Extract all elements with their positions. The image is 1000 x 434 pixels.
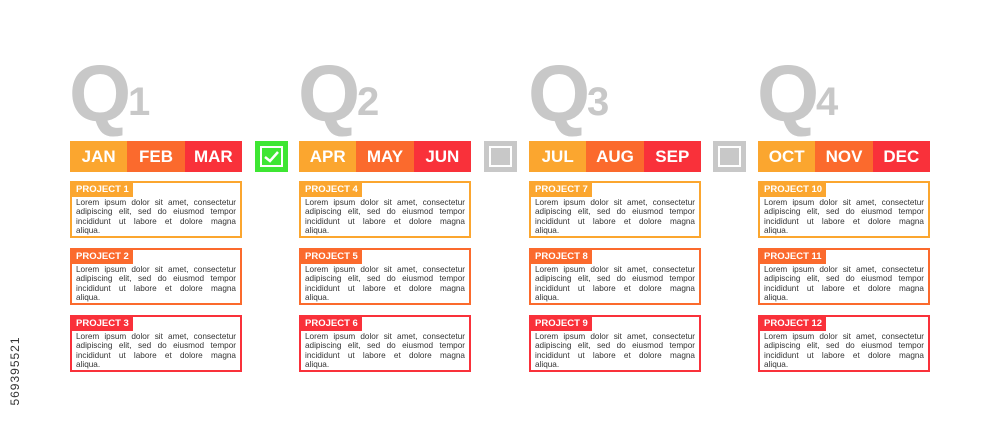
project 4: adipiscing elit, sed do eiusmod tempor xyxy=(305,207,465,216)
project 2: adipiscing elit, sed do eiusmod tempor xyxy=(76,274,236,283)
heading: Q4: Q xyxy=(757,49,819,138)
project 1 xyxy=(70,181,242,238)
project 3: PROJECT 3 xyxy=(76,318,129,329)
project 9: PROJECT 9 xyxy=(535,318,588,329)
project 10: Lorem ipsum dolor sit amet, consectetur xyxy=(764,198,924,207)
project 4: PROJECT 4 xyxy=(305,184,358,195)
project 8: aliqua. xyxy=(535,293,559,302)
months: Q2: JUN xyxy=(425,147,459,166)
project 3: aliqua. xyxy=(76,360,100,369)
months: Q1 xyxy=(70,141,242,172)
months: Q2: APR xyxy=(310,147,346,166)
project 1: PROJECT 1 xyxy=(76,184,129,195)
project 12 xyxy=(758,315,930,372)
project 6: incididunt ut labore et dolore magna xyxy=(305,351,465,360)
months: Q4: NOV xyxy=(826,147,862,166)
icon: checked box xyxy=(255,141,288,172)
project 2: incididunt ut labore et dolore magna xyxy=(76,284,236,293)
months: Q4: DEC xyxy=(883,147,919,166)
project 5 xyxy=(299,248,471,305)
project 10: adipiscing elit, sed do eiusmod tempor xyxy=(764,207,924,216)
project 12: PROJECT 12 xyxy=(764,318,822,329)
project 9 xyxy=(529,315,701,372)
project 6: Lorem ipsum dolor sit amet, consectetur xyxy=(305,332,465,341)
months: Q1: MAR xyxy=(194,147,233,166)
project 7: Lorem ipsum dolor sit amet, consectetur xyxy=(535,198,695,207)
months: Q2: MAY xyxy=(367,147,403,166)
project 3: Lorem ipsum dolor sit amet, consectetur xyxy=(76,332,236,341)
project 7: incididunt ut labore et dolore magna xyxy=(535,217,695,226)
column: Q1 xyxy=(69,49,242,372)
months: Q3: AUG xyxy=(596,147,634,166)
project 11: adipiscing elit, sed do eiusmod tempor xyxy=(764,274,924,283)
project 7: PROJECT 7 xyxy=(535,184,588,195)
project 4: aliqua. xyxy=(305,226,329,235)
project 6: aliqua. xyxy=(305,360,329,369)
project 5: aliqua. xyxy=(305,293,329,302)
months: Q1: JAN xyxy=(82,147,116,166)
project 1: aliqua. xyxy=(76,226,100,235)
project 9: Lorem ipsum dolor sit amet, consectetur xyxy=(535,332,695,341)
heading: Q2: 2 xyxy=(357,80,379,124)
stock id text: 569395521 xyxy=(8,336,22,406)
project 10: PROJECT 10 xyxy=(764,184,822,195)
project 11: PROJECT 11 xyxy=(764,251,822,262)
project 11: Lorem ipsum dolor sit amet, consectetur xyxy=(764,265,924,274)
project 9: aliqua. xyxy=(535,360,559,369)
project 11: incididunt ut labore et dolore magna xyxy=(764,284,924,293)
icon: empty box xyxy=(713,141,746,172)
project 7 xyxy=(529,181,701,238)
project 3 xyxy=(70,315,242,372)
project 3: incididunt ut labore et dolore magna xyxy=(76,351,236,360)
project 6: PROJECT 6 xyxy=(305,318,358,329)
project 4: Lorem ipsum dolor sit amet, consectetur xyxy=(305,198,465,207)
months: Q2 xyxy=(299,141,471,172)
project 11 xyxy=(758,248,930,305)
project 5: PROJECT 5 xyxy=(305,251,358,262)
project 4: incididunt ut labore et dolore magna xyxy=(305,217,465,226)
project 1: Lorem ipsum dolor sit amet, consectetur xyxy=(76,198,236,207)
project 8: PROJECT 8 xyxy=(535,251,588,262)
project 12: incididunt ut labore et dolore magna xyxy=(764,351,924,360)
months: Q3: JUL xyxy=(542,147,574,166)
project 2: Lorem ipsum dolor sit amet, consectetur xyxy=(76,265,236,274)
project 5: adipiscing elit, sed do eiusmod tempor xyxy=(305,274,465,283)
column: Q3 xyxy=(528,49,701,372)
months: Q1: FEB xyxy=(139,147,173,166)
months: Q3: SEP xyxy=(655,147,689,166)
project 7: adipiscing elit, sed do eiusmod tempor xyxy=(535,207,695,216)
project 6 xyxy=(299,315,471,372)
heading: Q3: 3 xyxy=(587,80,609,124)
heading: Q3: Q xyxy=(528,49,590,138)
project 2: PROJECT 2 xyxy=(76,251,129,262)
project 8: adipiscing elit, sed do eiusmod tempor xyxy=(535,274,695,283)
heading: Q1: 1 xyxy=(128,80,150,124)
project 12: aliqua. xyxy=(764,360,788,369)
project 6: adipiscing elit, sed do eiusmod tempor xyxy=(305,341,465,350)
project 9: adipiscing elit, sed do eiusmod tempor xyxy=(535,341,695,350)
heading: Q2: Q xyxy=(298,49,360,138)
project 7: aliqua. xyxy=(535,226,559,235)
project 9: incididunt ut labore et dolore magna xyxy=(535,351,695,360)
heading: Q1: Q xyxy=(69,49,131,138)
project 10 xyxy=(758,181,930,238)
project 4 xyxy=(299,181,471,238)
project 5: incididunt ut labore et dolore magna xyxy=(305,284,465,293)
project 8 xyxy=(529,248,701,305)
project 8: Lorem ipsum dolor sit amet, consectetur xyxy=(535,265,695,274)
column: Q4 xyxy=(757,49,930,372)
project 3: adipiscing elit, sed do eiusmod tempor xyxy=(76,341,236,350)
project 10: incididunt ut labore et dolore magna xyxy=(764,217,924,226)
months: Q4: OCT xyxy=(769,147,805,166)
project 2: aliqua. xyxy=(76,293,100,302)
project 2 xyxy=(70,248,242,305)
project 12: adipiscing elit, sed do eiusmod tempor xyxy=(764,341,924,350)
project 10: aliqua. xyxy=(764,226,788,235)
project 12: Lorem ipsum dolor sit amet, consectetur xyxy=(764,332,924,341)
project 11: aliqua. xyxy=(764,293,788,302)
column: Q2 xyxy=(298,49,471,372)
project 8: incididunt ut labore et dolore magna xyxy=(535,284,695,293)
project 1: adipiscing elit, sed do eiusmod tempor xyxy=(76,207,236,216)
icon: empty box xyxy=(484,141,517,172)
project 1: incididunt ut labore et dolore magna xyxy=(76,217,236,226)
months: Q3 xyxy=(529,141,701,172)
project 5: Lorem ipsum dolor sit amet, consectetur xyxy=(305,265,465,274)
heading: Q4: 4 xyxy=(816,80,838,124)
months: Q4 xyxy=(758,141,930,172)
